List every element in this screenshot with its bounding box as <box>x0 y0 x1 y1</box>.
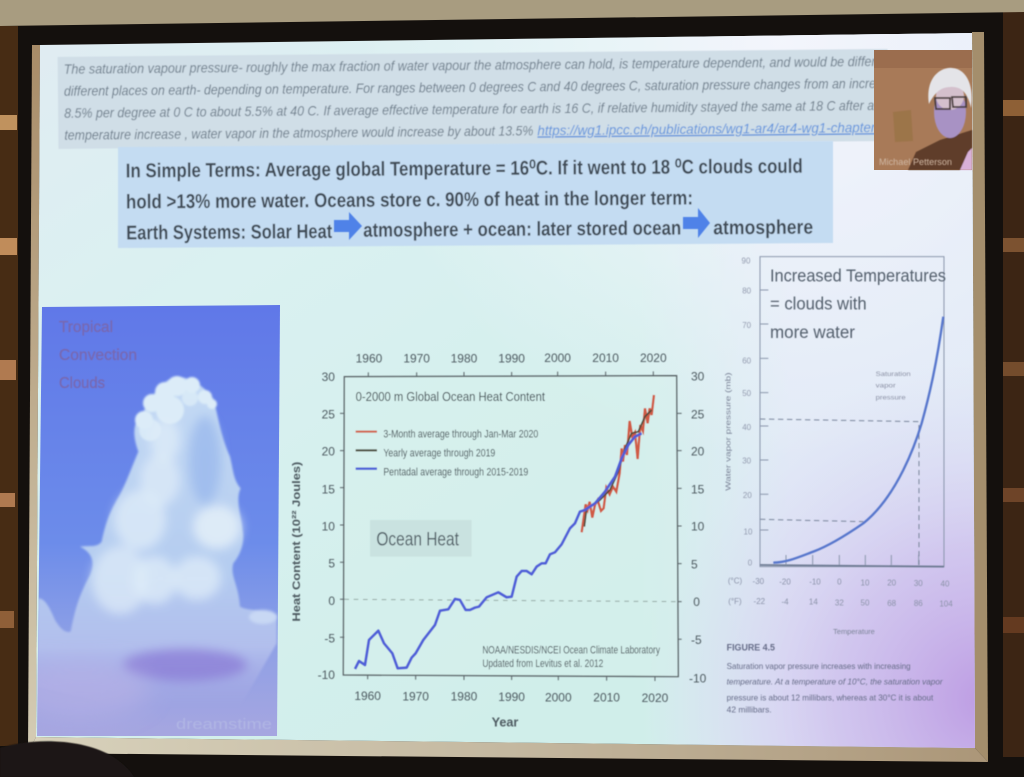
dashed guides <box>760 419 920 565</box>
source credit: NOAA/NESDIS/NCEI Ocean Climate Laboratory <box>482 644 660 656</box>
bottom year labels: 1990 <box>498 690 525 704</box>
legend: Pentadal average through 2015-2019 <box>383 466 528 478</box>
x axis Fahrenheit labels: 68 <box>887 599 897 608</box>
bottom year labels: 1980 <box>451 690 478 704</box>
simple terms callout: atmosphere <box>713 217 813 239</box>
y axis labels: 30 <box>742 456 752 465</box>
bottom year labels: 2020 <box>642 691 669 705</box>
simple terms callout: hold >13% more water. Oceans store c. 90% of heat in the longer term: <box>126 187 693 213</box>
left value labels: 0 <box>328 594 335 608</box>
left value labels: 20 <box>322 445 335 459</box>
photo caption: Clouds <box>59 375 105 392</box>
plot frame <box>343 376 678 677</box>
right value labels <box>689 369 707 685</box>
bottom year labels: 1970 <box>402 689 429 703</box>
panel: tropical convection clouds photo <box>10 305 280 736</box>
saturation curve <box>773 317 943 563</box>
curve annotation <box>876 371 911 401</box>
explanatory text block <box>58 49 888 149</box>
right cloud puff <box>249 610 277 624</box>
y axis labels: 70 <box>742 321 752 330</box>
zero line <box>344 599 678 602</box>
audience head silhouette <box>0 741 134 777</box>
left value labels: -10 <box>318 668 335 682</box>
figure caption: pressure is about 12 millibars, whereas at 30°C it is about <box>727 693 934 703</box>
chart annotation heading: more water <box>770 322 855 342</box>
baseline <box>760 565 944 567</box>
left value labels: 10 <box>322 520 335 534</box>
photo caption: Convection <box>59 347 137 364</box>
right value labels: -5 <box>691 633 702 647</box>
right value labels: 10 <box>691 520 705 534</box>
left value labels: 25 <box>322 407 335 421</box>
legend: Yearly average through 2019 <box>383 447 495 459</box>
bottom year labels <box>354 689 669 705</box>
x axis Fahrenheit labels: 14 <box>809 598 818 607</box>
x axis Fahrenheit labels: 86 <box>914 599 923 608</box>
cloud mid tones <box>92 418 241 614</box>
figure caption: FIGURE 4.5 <box>727 643 775 653</box>
right value labels: 15 <box>691 482 705 496</box>
bottom year labels: 1960 <box>354 689 381 703</box>
ocean heat label <box>370 520 472 557</box>
simple terms callout: In Simple Terms: Average global Temperature = 16⁰C. If it went to 18 ⁰C clouds could <box>126 156 803 182</box>
x axis Celsius labels: -20 <box>779 578 791 587</box>
simple terms callout: Earth Systems: Solar Heat <box>126 221 333 244</box>
right value labels: 25 <box>691 407 705 421</box>
axis ticks <box>340 371 682 681</box>
axis ticks <box>760 290 919 565</box>
top year labels: 2020 <box>640 351 667 365</box>
explanatory text block: different places on earth- depending on temperature. For ranges between 0 degrees C and 40 degrees C, saturation pressure changes from an incre <box>64 75 876 99</box>
right value labels: 20 <box>691 445 705 459</box>
left value labels <box>318 370 335 682</box>
photo caption <box>59 319 137 392</box>
chart title: 0-2000 m Global Ocean Heat Content <box>356 389 545 404</box>
chart: ocean heat content <box>291 351 707 730</box>
icon: arrow solar heat to atmosphere <box>334 212 362 240</box>
x axis Celsius labels: 30 <box>914 579 923 588</box>
y axis labels: 90 <box>742 256 751 265</box>
x axis Celsius labels: -10 <box>809 578 821 587</box>
right value labels: 5 <box>691 557 698 571</box>
x axis Fahrenheit labels: -22 <box>754 597 766 606</box>
y axis title: Water vapor pressure (mb) <box>724 372 733 491</box>
cloud blue shaded side <box>189 416 221 504</box>
right value labels: -10 <box>689 671 707 685</box>
left value labels: -5 <box>324 631 335 645</box>
left value labels: 5 <box>328 557 335 571</box>
x axis Celsius labels: 20 <box>887 578 897 587</box>
x axis Celsius labels: -30 <box>753 577 765 586</box>
x axis Celsius labels: 40 <box>941 580 950 589</box>
y axis labels: 0 <box>748 558 753 567</box>
cloud image <box>38 374 278 716</box>
top year labels: 2000 <box>544 351 571 365</box>
y axis labels: 10 <box>744 528 753 537</box>
x axis title: Temperature <box>833 627 875 636</box>
figure caption: temperature. At a temperature of 10°C, the saturation vapor <box>727 677 944 687</box>
simple terms callout <box>118 141 833 248</box>
top year labels: 1980 <box>451 351 478 365</box>
chart annotation heading: Increased Temperatures <box>770 266 946 286</box>
simple terms callout: atmosphere + ocean: later stored ocean <box>363 218 681 242</box>
left value labels: 15 <box>322 482 335 496</box>
x axis Celsius labels: 0 <box>837 578 842 587</box>
bottom year labels: 2010 <box>593 691 620 705</box>
x axis Fahrenheit labels: -4 <box>781 598 789 607</box>
explanatory text block: https://wg1.ipcc.ch/publications/wg1-ar4/ar4-wg1-chapter <box>537 119 877 138</box>
x axis Celsius labels: (°C) <box>728 576 742 585</box>
right value labels: 0 <box>693 595 700 609</box>
red 3-month line <box>582 395 654 532</box>
figure caption <box>727 643 944 715</box>
y axis labels: 20 <box>743 491 752 500</box>
legend <box>356 429 538 478</box>
explanatory text block: temperature increase , water vapor in the atmosphere would increase by about 13.5% <box>64 122 533 143</box>
y axis labels: 60 <box>742 356 752 365</box>
top year labels: 1970 <box>403 352 430 366</box>
watermark: dreamstime <box>176 716 272 733</box>
top year labels: 2010 <box>592 351 619 365</box>
y axis title: Heat Content (10²² Joules) <box>291 461 303 622</box>
x axis Fahrenheit labels: (°F) <box>728 597 742 606</box>
curve annotation: pressure <box>876 394 906 401</box>
left value labels: 30 <box>322 370 335 384</box>
x axis Celsius labels <box>728 576 950 589</box>
presenter video thumbnail <box>874 50 972 170</box>
curve annotation: Saturation <box>876 371 911 378</box>
x axis title: Year <box>492 716 518 730</box>
source credit: Updated from Levitus et al. 2012 <box>482 658 603 670</box>
bottom year labels: 2000 <box>545 690 572 704</box>
y axis labels: 80 <box>742 286 752 295</box>
explanatory text block: The saturation vapour pressure- roughly the max fraction of water vapour the atmosphere can hold, is temperature dependent, and would be differ <box>64 53 877 77</box>
chart: saturation vapour pressure <box>724 256 953 715</box>
top year labels <box>356 351 667 366</box>
top year labels: 1960 <box>356 352 383 366</box>
y axis labels: 50 <box>742 389 752 398</box>
x axis Fahrenheit labels <box>728 597 953 609</box>
legend: 3-Month average through Jan-Mar 2020 <box>383 429 538 441</box>
right value labels: 30 <box>691 369 705 383</box>
curve annotation: vapor <box>876 383 897 390</box>
x axis Celsius labels: 10 <box>861 578 870 587</box>
icon: arrow ocean to atmosphere <box>683 208 710 238</box>
presenter video thumbnail: Michael Petterson <box>879 157 952 167</box>
x axis Fahrenheit labels: 32 <box>835 598 844 607</box>
top year labels: 1990 <box>498 351 525 365</box>
low haze <box>38 667 144 716</box>
figure caption: 42 millibars. <box>727 705 772 715</box>
photo caption: Tropical <box>59 319 113 336</box>
cloud bright lobes <box>135 376 217 441</box>
y axis labels <box>742 256 753 567</box>
explanatory text block: 8.5% per degree at 0 C to about 5.5% at 40 C. If average effective temperature for earth is 16 C, if relative humidity stayed the same at 18 C after a <box>64 97 874 121</box>
ocean heat label: Ocean Heat <box>376 529 459 550</box>
plot frame <box>760 257 944 567</box>
y axis labels: 40 <box>742 423 752 432</box>
dark yearly line <box>584 410 652 527</box>
chart annotation heading: = clouds with <box>770 293 867 313</box>
cloud shadow <box>123 649 247 681</box>
x axis Fahrenheit labels: 104 <box>939 600 953 609</box>
source credit <box>482 644 660 670</box>
x axis Fahrenheit labels: 50 <box>861 598 870 607</box>
figure caption: Saturation vapor pressure increases with increasing <box>727 661 911 671</box>
blue pentadal line <box>355 433 642 669</box>
chart annotation heading <box>770 266 946 342</box>
